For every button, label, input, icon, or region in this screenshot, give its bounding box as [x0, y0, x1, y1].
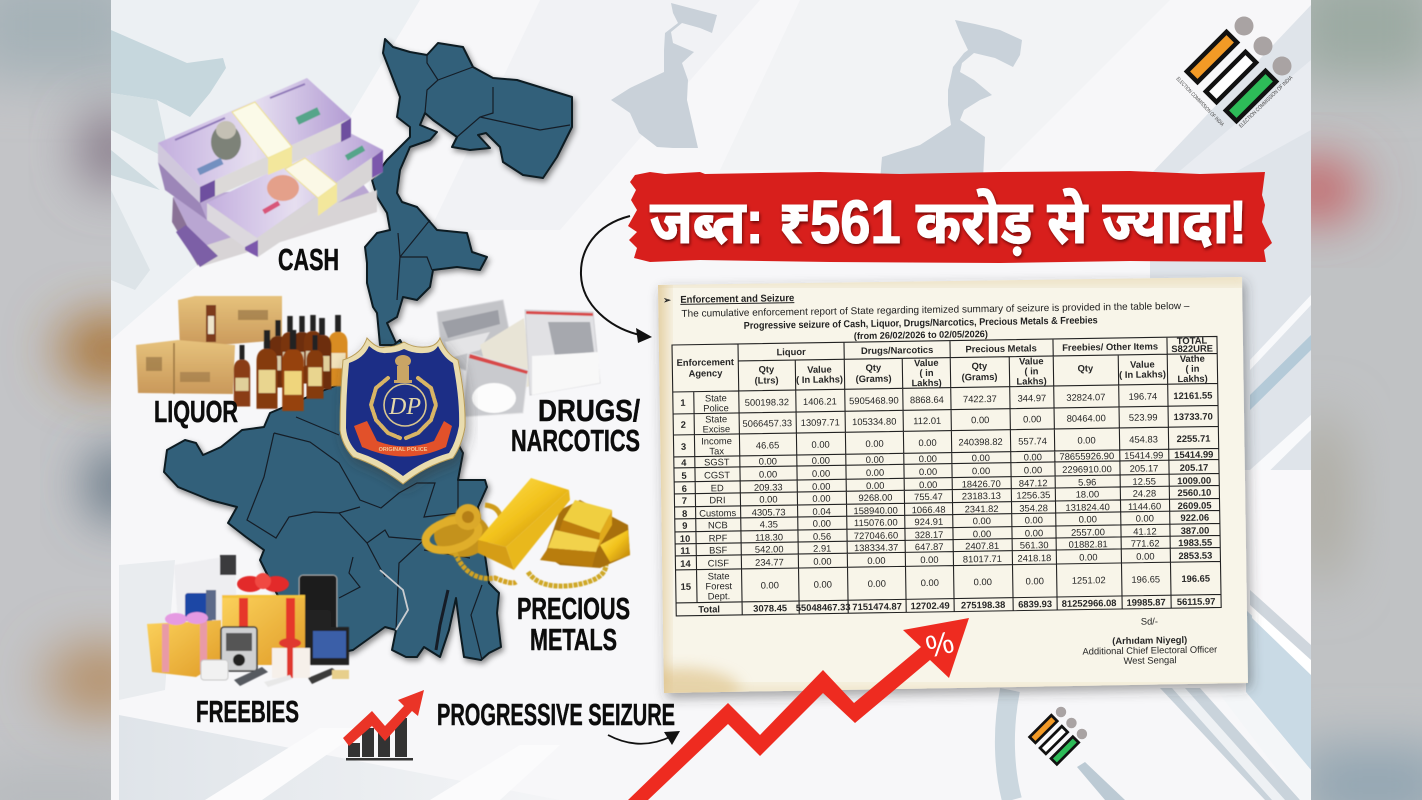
phone	[299, 575, 337, 655]
row 14: 0.00	[867, 555, 886, 566]
row 8: 158940.00	[853, 504, 898, 516]
map: northern districts	[365, 39, 572, 345]
row 15: 196.65	[1131, 573, 1160, 585]
row 11: 542.00	[755, 543, 784, 555]
jewellery	[422, 504, 606, 586]
table header: ( In Lakhs)	[1119, 368, 1166, 380]
label: freebies: FREEBIES	[196, 694, 299, 729]
row 15: 0.00	[814, 579, 832, 590]
lower bundle	[158, 162, 377, 267]
row 3: 557.74	[1018, 435, 1047, 447]
blurred left side bar	[0, 0, 111, 800]
row 15: 0.00	[1026, 575, 1044, 586]
row 15: Dept.	[708, 590, 730, 601]
row 14: 0.00	[920, 554, 939, 565]
row 8: 4305.73	[752, 506, 786, 518]
row 9: 115076.00	[854, 516, 898, 528]
row 6: 1009.00	[1177, 475, 1211, 486]
title banner	[628, 171, 1272, 263]
table header: ( in	[919, 367, 934, 378]
row 14: 2853.53	[1178, 550, 1212, 561]
row 11: BSF	[709, 544, 728, 555]
table header: Liquor	[776, 346, 806, 357]
badge: DP monogram: DP	[388, 394, 421, 420]
row 11: 11	[680, 545, 690, 556]
cube charger	[201, 660, 228, 680]
row 1: Police	[703, 402, 729, 414]
row 11: 1983.55	[1178, 537, 1212, 548]
row 10: 2557.00	[1071, 526, 1105, 538]
row 9: 0.00	[973, 515, 991, 526]
row 8: 2341.82	[965, 503, 999, 514]
map: Hooghly river	[380, 570, 408, 630]
row 3: 46.65	[756, 439, 779, 451]
label: cash: CASH	[278, 242, 339, 277]
small gold bars	[540, 500, 630, 568]
carton stack	[136, 296, 282, 394]
icon: cash bundles	[158, 78, 383, 267]
total row: 7151474.87	[852, 600, 902, 612]
label: precious metals: METALS	[530, 622, 617, 657]
label: precious metals	[517, 591, 630, 657]
icon: police shield badge	[340, 338, 465, 484]
blurred right side bar	[1311, 0, 1422, 800]
row 7: 23183.13	[962, 490, 1001, 501]
red rising trend arrow	[628, 618, 969, 800]
row 11: 561.30	[1020, 539, 1049, 551]
row 6: 0.00	[866, 480, 884, 491]
row 2	[680, 406, 1213, 435]
icon: freebies gifts and gadgets	[147, 555, 349, 687]
row 11	[680, 537, 1212, 556]
row 8: 8	[682, 508, 687, 519]
table header: Value	[1019, 355, 1044, 367]
icon: progressive seizure chart	[343, 690, 424, 760]
row 5: 2296910.00	[1062, 463, 1112, 475]
row 8: 0.04	[812, 506, 831, 517]
label: drugs / narcotics: DRUGS/	[538, 393, 640, 428]
report heading text: Enforcement and Seizure	[680, 293, 795, 306]
row 10: 727046.60	[854, 529, 898, 541]
row 4: 15414.99	[1174, 449, 1213, 460]
row 5: 0.00	[866, 467, 884, 478]
row 7: 18.00	[1076, 488, 1099, 500]
row 10: RPF	[709, 532, 728, 543]
map: southern districts	[164, 340, 501, 660]
row 3: 0.00	[918, 437, 937, 448]
total row: 12702.49	[910, 600, 950, 611]
row 8: 2609.05	[1178, 500, 1212, 511]
row 5: 0.00	[1024, 464, 1042, 475]
row 3	[681, 428, 1211, 457]
icon: gold bars and jewellery	[422, 478, 630, 586]
row 5: 5	[681, 470, 687, 481]
row 7	[682, 487, 1211, 506]
total row: 3078.45	[753, 602, 787, 614]
tablet	[310, 627, 349, 665]
table grid	[672, 336, 1221, 616]
row 4: 0.00	[812, 455, 830, 466]
row 15: 0.00	[974, 576, 992, 587]
row 5	[681, 462, 1208, 481]
row 1: 5905468.90	[849, 394, 899, 406]
row 8	[682, 500, 1212, 519]
logo: Election Commission large: ELECTION COMMISSION OF INDIA	[1175, 76, 1225, 128]
arrow: seizure to red trend	[608, 731, 680, 745]
row 4: 0.00	[919, 453, 937, 464]
row 8: 1144.60	[1128, 500, 1161, 512]
badge: laurel wreath	[371, 378, 436, 438]
bottom bag	[463, 353, 528, 417]
row 1: 1406.21	[803, 395, 837, 407]
top left bag	[437, 300, 512, 372]
row 15: 0.00	[761, 579, 779, 591]
row 5: 0.00	[812, 468, 830, 479]
total row: 19985.87	[1126, 596, 1166, 608]
row 15: State	[708, 570, 730, 581]
table header: ( in	[1024, 365, 1039, 376]
row 1	[680, 385, 1213, 414]
row 6: 5.96	[1078, 476, 1096, 488]
report paper	[620, 270, 1260, 712]
label: drugs / narcotics	[511, 393, 640, 458]
total row	[698, 595, 1215, 615]
row 8: 354.28	[1019, 502, 1048, 514]
row 14: 81017.71	[963, 553, 1002, 564]
row 8: 1066.48	[912, 504, 946, 515]
row 1: 196.74	[1128, 390, 1157, 402]
table header: Agency	[688, 367, 723, 379]
table header: TOTAL	[1177, 335, 1208, 346]
row 2: 2	[681, 419, 686, 430]
row 14: 0.00	[813, 556, 832, 567]
table header: ( In Lakhs)	[796, 373, 843, 385]
row 11: 01882.81	[1069, 538, 1108, 550]
report heading text: The cumulative enforcement report of State regarding itemized summary of seizure is provided in the table below –	[681, 301, 1190, 320]
table header: (Grams)	[855, 373, 892, 384]
table header: Qty	[1078, 362, 1094, 374]
paper ageing stains	[620, 270, 1260, 712]
row 9	[682, 512, 1209, 531]
row 14: 14	[680, 558, 692, 569]
map of West Bengal	[164, 39, 572, 660]
table header: Value	[914, 357, 939, 368]
row 5: 205.17	[1130, 462, 1158, 474]
logo: Election Commission small	[1030, 707, 1087, 764]
row 10: 328.17	[915, 529, 943, 540]
row 4	[681, 449, 1213, 468]
row 3: 2255.71	[1177, 433, 1211, 444]
row 9: 922.06	[1180, 512, 1209, 523]
badge: emblem	[394, 355, 412, 383]
table header: S822URE	[1171, 343, 1213, 354]
signature block: West Sengal	[1123, 654, 1177, 666]
table header: (Grams)	[961, 371, 998, 382]
table header: ( in	[1185, 363, 1200, 374]
row 9: 0.00	[1025, 514, 1043, 525]
row 10: 0.00	[1025, 527, 1043, 538]
row 7: DRI	[709, 494, 726, 505]
row 7: 9268.00	[858, 492, 892, 503]
table header: Freebies/ Other Items	[1062, 340, 1158, 353]
row 11: 138334.37	[854, 541, 898, 553]
row 2: Excise	[702, 423, 730, 435]
middle bundle	[207, 133, 383, 257]
row 14: CISF	[708, 557, 729, 568]
row 10	[680, 525, 1209, 544]
faint map silhouette one	[611, 3, 717, 148]
row 6: 0.00	[812, 481, 830, 492]
row 2: 0.00	[1023, 413, 1041, 424]
table header: Lakhs)	[1016, 375, 1047, 387]
row 1: 7422.37	[963, 393, 997, 404]
row 10: 0.00	[973, 528, 991, 539]
row 3: 0.00	[1077, 434, 1096, 446]
row 5: CGST	[704, 469, 730, 481]
row 9: 0.00	[1136, 512, 1154, 524]
row 15: 1251.02	[1072, 574, 1106, 586]
row 15: 0.00	[868, 578, 886, 589]
row 15: 15	[680, 581, 691, 592]
row 2: 13733.70	[1174, 411, 1213, 422]
row 9: 0.00	[813, 518, 831, 529]
row 8: 131824.40	[1065, 501, 1110, 513]
table header: Vathe	[1180, 353, 1205, 364]
icon: liquor boxes and bottles	[136, 296, 348, 411]
row 9: NCB	[708, 519, 728, 530]
row 2: 0.00	[971, 414, 989, 425]
row 8: Customs	[699, 507, 737, 519]
table header: (Ltrs)	[754, 374, 779, 386]
row 10: 118.30	[755, 531, 783, 543]
row 7: 24.28	[1133, 487, 1156, 499]
row 3: 0.00	[811, 439, 830, 450]
row 7: 7	[682, 495, 687, 506]
row 2: 112.01	[913, 415, 941, 426]
row 4: SGST	[704, 456, 730, 468]
row 9: 0.00	[1079, 513, 1097, 525]
row 1: 32824.07	[1066, 391, 1106, 403]
row 7: 755.47	[914, 491, 943, 502]
row 2: 5066457.33	[742, 417, 792, 429]
row 11: 2.91	[813, 543, 831, 554]
row 15: 196.65	[1181, 573, 1210, 584]
table header: Drugs/Narcotics	[861, 344, 933, 356]
row 7: 0.00	[812, 493, 831, 504]
row 9: 9	[682, 520, 688, 531]
row 11: 2407.81	[965, 540, 999, 551]
row 6: 847.12	[1019, 477, 1048, 489]
row 4: 78655926.90	[1059, 450, 1114, 462]
row 6: 18426.70	[962, 478, 1001, 489]
table header: Precious Metals	[965, 342, 1037, 354]
row 14: 0.00	[1079, 551, 1098, 563]
row 14: 234.77	[755, 556, 784, 568]
table header: Value	[807, 363, 832, 375]
small left gift	[147, 612, 221, 677]
signature block: Sd/-	[1141, 615, 1158, 627]
table header: Value	[1130, 358, 1155, 370]
logo: Election Commission large	[1175, 16, 1294, 129]
total row: 81252966.08	[1062, 597, 1117, 609]
row 4: 0.00	[866, 454, 884, 465]
row 7: 2560.10	[1177, 487, 1211, 498]
signature block: (Arhıdam Niyegl)	[1112, 634, 1187, 646]
table header: Enforcement	[677, 356, 734, 368]
row 14: 0.00	[1136, 550, 1155, 562]
row 10: 387.00	[1181, 525, 1209, 536]
report heading text	[663, 287, 1190, 345]
total row: 56115.97	[1177, 595, 1215, 607]
large yellow gift	[222, 573, 305, 665]
row 10: 0.56	[813, 531, 831, 542]
table header: Qty	[758, 363, 775, 375]
total row: 6839.93	[1018, 598, 1052, 610]
row 6: 0.00	[919, 479, 937, 490]
label: progressive seizure: PROGRESSIVE SEIZURE	[437, 697, 675, 732]
row 4: 0.00	[759, 455, 777, 467]
upper bundle	[158, 78, 351, 203]
badge: ribbon	[354, 421, 452, 456]
row 15: 0.00	[921, 577, 939, 588]
row 1: 500198.32	[745, 396, 789, 408]
row 4: 15414.99	[1124, 449, 1163, 461]
small white gift	[272, 638, 310, 678]
label: precious metals: PRECIOUS	[517, 591, 630, 626]
total row: Total	[698, 603, 720, 615]
table header: Lakhs)	[1177, 373, 1208, 384]
row 7: 0.00	[759, 493, 778, 505]
row 3: Income	[701, 435, 732, 447]
report heading text: ➢	[663, 295, 671, 305]
label: liquor: LIQUOR	[154, 394, 238, 429]
row 11: 647.87	[915, 541, 944, 552]
accessories	[234, 667, 349, 687]
row 6: 6	[682, 483, 687, 494]
icon: narcotics bags	[437, 300, 600, 417]
row 1: 344.97	[1017, 392, 1046, 404]
row 2: 523.99	[1129, 411, 1158, 423]
row 4: 0.00	[972, 452, 990, 463]
row 2: 13097.71	[801, 416, 840, 428]
row 5: 0.00	[972, 465, 990, 476]
total row: 275198.38	[961, 599, 1005, 610]
row 3: 0.00	[865, 438, 884, 449]
badge: ribbon: ORIGINAL POLICE	[379, 447, 428, 453]
table header: Qty	[865, 362, 882, 373]
row 2: State	[705, 413, 727, 424]
row 3: 240398.82	[958, 436, 1003, 448]
row 5: 0.00	[919, 466, 937, 477]
row 10: 10	[680, 533, 690, 544]
table header: Lakhs)	[911, 377, 942, 388]
bottles	[234, 315, 348, 411]
row 9: 924.91	[914, 516, 943, 527]
row 5: 0.00	[759, 468, 777, 480]
row 3: 454.83	[1129, 433, 1158, 445]
signature block: Additional Chief Electoral Officer	[1082, 643, 1217, 657]
row 6: ED	[711, 482, 724, 493]
row 11: 771.62	[1131, 537, 1160, 549]
appliance	[174, 555, 237, 625]
right bag	[525, 310, 600, 395]
row 14: 2418.18	[1017, 552, 1051, 564]
label: drugs / narcotics: NARCOTICS	[511, 423, 640, 458]
row 6: 12.55	[1132, 475, 1156, 487]
row 1: 12161.55	[1173, 390, 1212, 401]
total row: 55048467.33	[796, 601, 851, 613]
row 3: Tax	[709, 445, 724, 456]
camera	[221, 627, 257, 671]
report heading text: Progressive seizure of Cash, Liquor, Drugs/Narcotics, Precious Metals & Freebies	[744, 315, 1098, 332]
table header	[676, 335, 1214, 392]
row 9: 4.35	[760, 518, 778, 530]
logo: Election Commission large: ELECTION COMMISSION OF INDIA	[1238, 75, 1294, 129]
row 4: 4	[681, 457, 687, 468]
row 1: 1	[680, 397, 686, 408]
row 6	[682, 475, 1211, 494]
badge: DP monogram	[384, 384, 426, 426]
percent sign: %	[922, 624, 957, 665]
large gold bar	[478, 478, 570, 570]
row 7: 1256.35	[1016, 489, 1050, 501]
row 15: Forest	[705, 580, 733, 592]
signature block	[1082, 614, 1217, 667]
row 6: 209.33	[754, 481, 783, 493]
row 2: 80464.00	[1067, 412, 1106, 424]
row 3: 3	[681, 441, 686, 452]
row 10: 41.12	[1133, 525, 1157, 537]
row 2: 105334.80	[852, 415, 896, 427]
row 5: 205.17	[1180, 462, 1208, 473]
map: district borders	[247, 55, 570, 660]
row 14	[680, 550, 1212, 569]
row 1: State	[705, 392, 727, 403]
arrow: banner to report	[581, 216, 652, 343]
row 1: 8868.64	[910, 394, 944, 405]
row 15	[680, 563, 1210, 602]
seizure report table	[663, 286, 1222, 673]
title text: जब्त: ₹561 करोड़ से ज्यादा!	[650, 188, 1247, 256]
table header: Qty	[971, 360, 988, 371]
powder bag centre	[480, 318, 532, 400]
faint map silhouette two	[880, 20, 1022, 180]
report heading text: (from 26/02/2026 to 02/05/2026)	[854, 329, 988, 342]
row 4: 0.00	[1024, 451, 1042, 462]
